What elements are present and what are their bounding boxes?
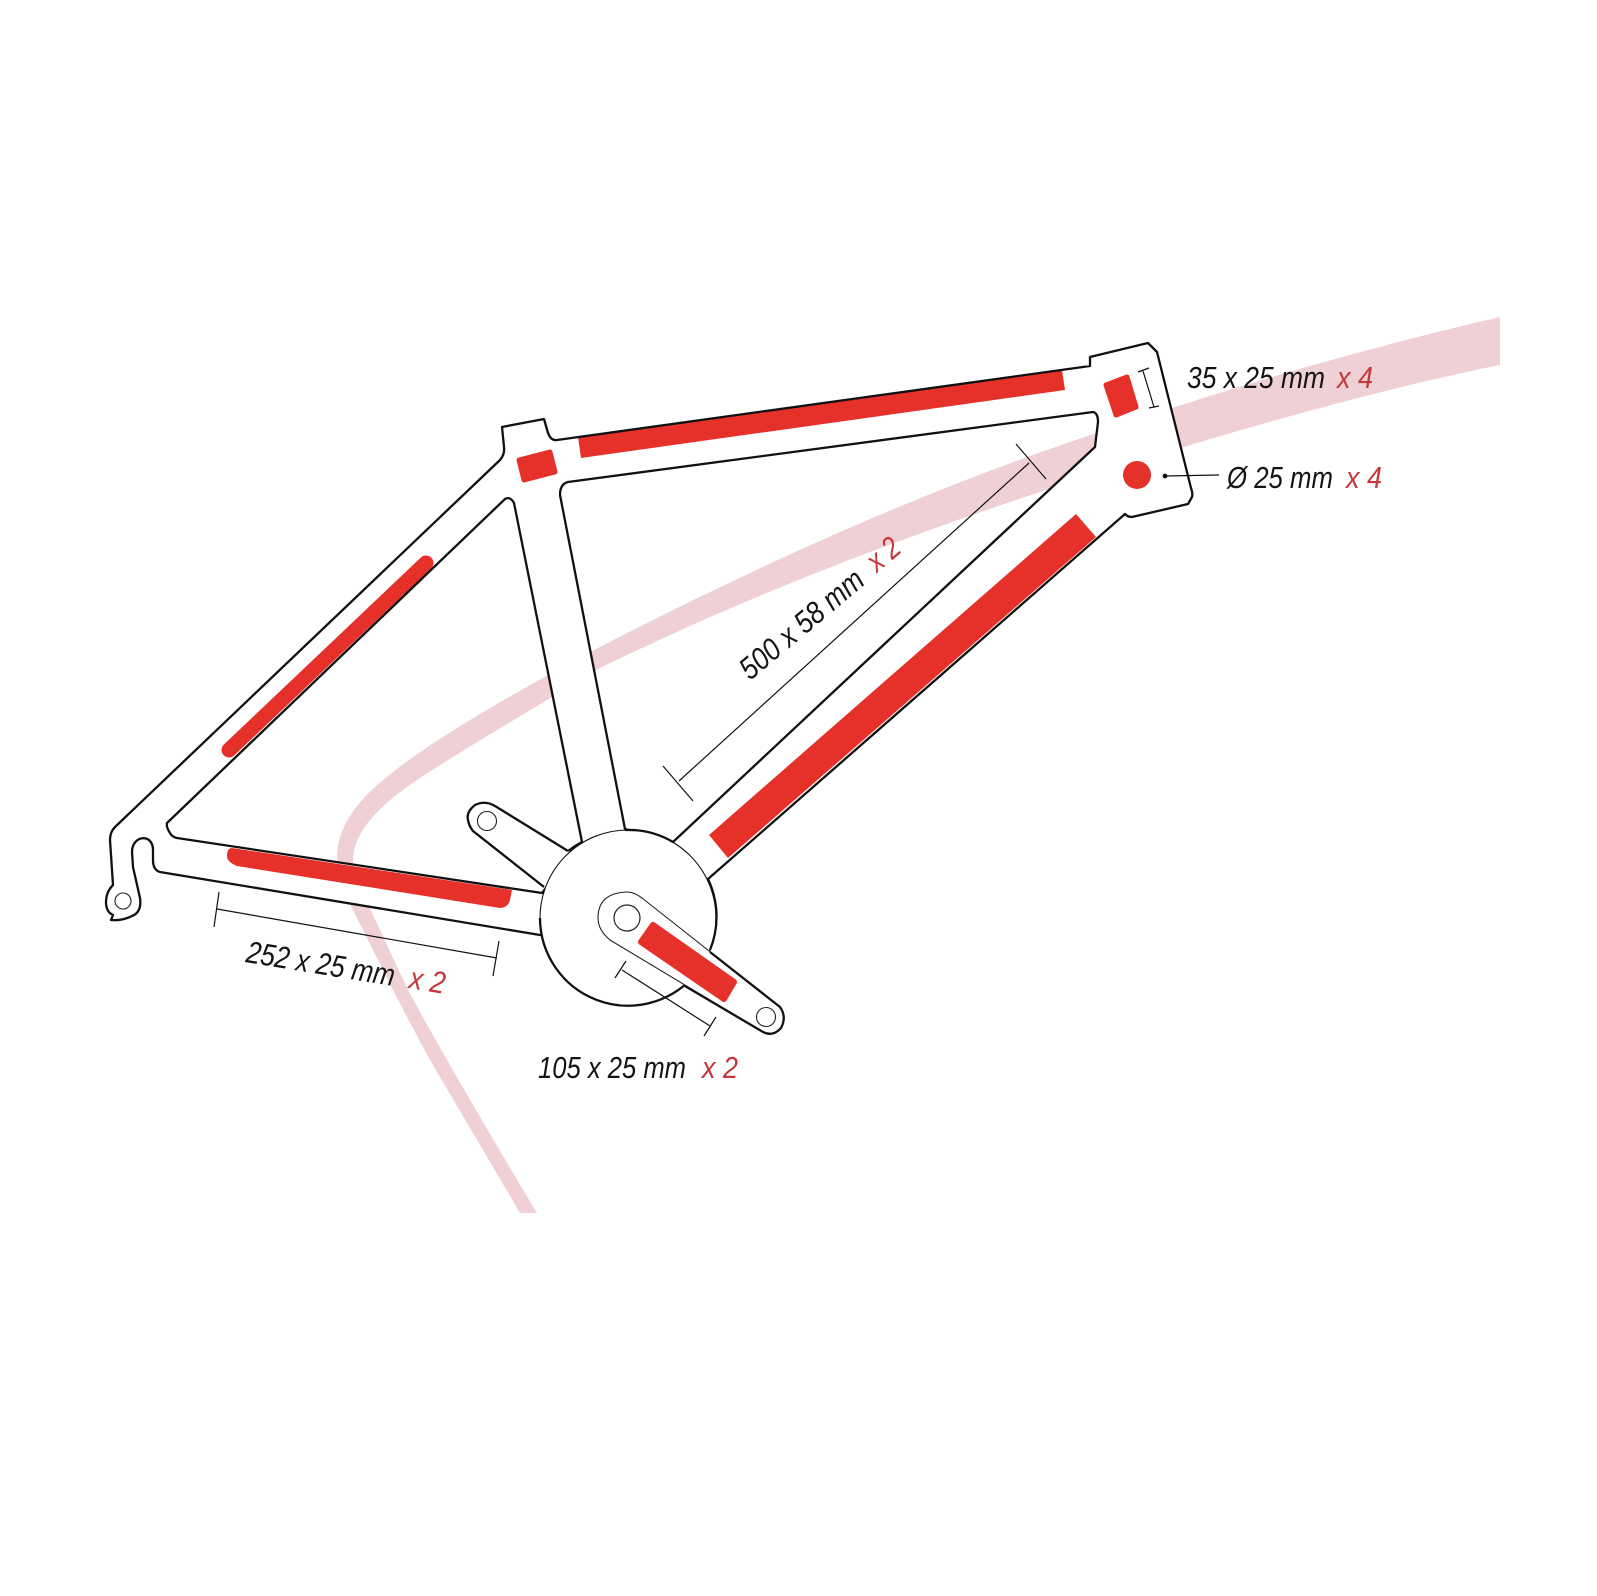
label: diameter 25 mm x 4: Ø 25 mm [1226, 460, 1333, 495]
front crank arm [598, 892, 784, 1034]
label: 35 x 25 mm x 4: 35 x 25 mm [1187, 360, 1325, 395]
red sticker: crank arm [641, 925, 734, 999]
dimension line: chain stay [214, 892, 499, 976]
label: 105 x 25 mm x 2: x 2 [700, 1050, 738, 1085]
rear crank arm [468, 803, 568, 887]
frame outline [106, 343, 1192, 935]
label: 500 x 58 mm x 2: 500 x 58 mm [732, 562, 871, 686]
label: 500 x 58 mm x 2: x 2 [858, 530, 908, 579]
leader line: head tube circle [1163, 474, 1219, 478]
red sticker: seat stay [229, 563, 426, 750]
red sticker: chain stay [227, 848, 512, 908]
red sticker: seat cluster square [519, 452, 555, 480]
dropout hole [115, 893, 131, 909]
red sticker: down tube [709, 514, 1096, 858]
red sticker: head tube square [1106, 377, 1136, 415]
red sticker: top tube [578, 370, 1065, 458]
red sticker: head tube circle [1123, 461, 1151, 489]
label: 35 x 25 mm x 4: x 4 [1335, 360, 1373, 395]
label: diameter 25 mm x 4: x 4 [1344, 460, 1382, 495]
bottom bracket circle [540, 830, 717, 1006]
label: 105 x 25 mm x 2: 105 x 25 mm [538, 1050, 686, 1085]
label: 252 x 25 mm x 2: x 2 [405, 960, 448, 1001]
dimension line: head tube square [1138, 368, 1159, 408]
label: 252 x 25 mm x 2: 252 x 25 mm [243, 934, 398, 993]
background ribbon [337, 317, 1500, 1213]
frame fill [106, 343, 1192, 935]
dimension line: down tube [663, 444, 1046, 801]
dimension line: crank [615, 961, 716, 1036]
